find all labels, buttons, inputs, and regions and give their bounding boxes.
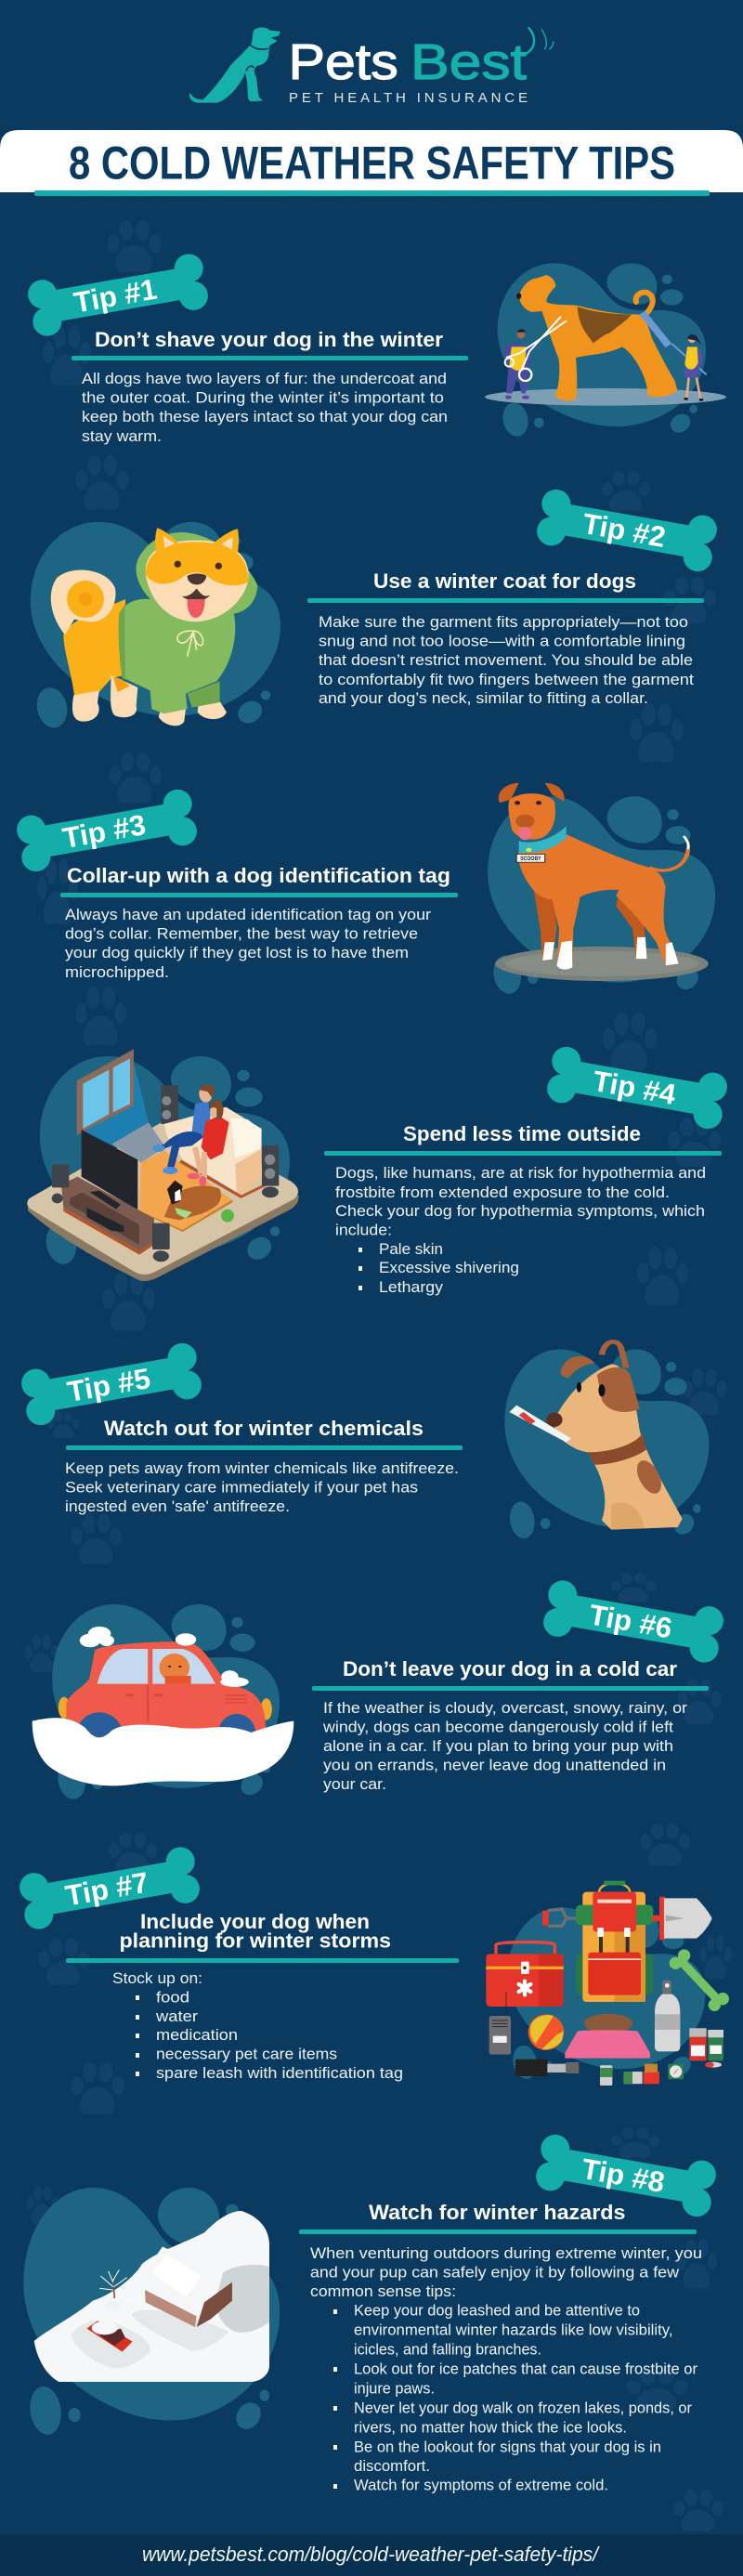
body text: the outer coat. During the winter it’s important to	[82, 388, 444, 407]
icon: sitting dog	[189, 27, 554, 103]
heading: Watch for winter hazards	[369, 2201, 626, 2224]
body text: you on errands, never leave dog unattended in	[323, 1757, 666, 1774]
panel: tip 6	[33, 1578, 725, 1802]
body text: ingested even 'safe' antifreeze.	[65, 1497, 290, 1515]
badge: tip 3 bone: Tip #3	[60, 808, 148, 855]
body text	[322, 1699, 687, 1793]
body text: Keep pets away from winter chemicals like antifreeze.	[65, 1459, 459, 1477]
heading: Collar-up with a dog identification tag	[67, 864, 450, 887]
illustration: car in snow with dog	[33, 1604, 293, 1802]
illustration: couple and dog watching TV	[27, 1049, 299, 1281]
body text	[65, 1459, 459, 1515]
illustration: dog with collar tag	[488, 783, 715, 997]
body text: microchipped.	[65, 963, 169, 981]
body text: injure paws.	[354, 2379, 435, 2397]
collar tag	[516, 855, 545, 862]
heading: planning for winter storms	[119, 1929, 391, 1953]
badge: tip 3 bone	[15, 787, 199, 874]
heading: Watch out for winter chemicals	[104, 1417, 424, 1440]
body text: alone in a car. If you plan to bring your pup with	[323, 1737, 673, 1755]
badge: tip 6 bone	[541, 1578, 725, 1665]
panel: tip 2	[31, 487, 719, 730]
heading	[119, 1910, 391, 1953]
illustration: sick dog with thermometer	[504, 1341, 709, 1541]
heading: Use a winter coat for dogs	[373, 569, 636, 593]
badge: tip 1 bone	[26, 252, 210, 338]
badge: tip 1 bone: Tip #1	[72, 272, 159, 320]
illustration: snowy house and car	[23, 2188, 280, 2438]
body text	[82, 370, 448, 445]
heading: Don’t leave your dog in a cold car	[343, 1657, 677, 1680]
panel: tip 1	[26, 252, 726, 445]
footer URL: www.petsbest.com/blog/cold-weather-pet-safety-tips/	[142, 2543, 600, 2566]
body text: All dogs have two layers of fur: the undercoat and	[82, 370, 447, 387]
body text: stay warm.	[82, 427, 162, 445]
body text: Dogs, like humans, are at risk for hypothermia and	[335, 1164, 706, 1182]
body text: snug and not too loose—with a comfortable lining	[319, 633, 685, 650]
badge: tip 2 bone: Tip #2	[580, 507, 668, 554]
logo word: Best: Best	[411, 34, 527, 90]
body text: necessary pet care items	[156, 2046, 337, 2063]
panel: tip 8	[23, 2132, 718, 2494]
body text: Pale skin	[379, 1240, 443, 1258]
body text: and your pup can safely enjoy it by following a few	[310, 2264, 680, 2282]
badge: tip 7 bone	[18, 1845, 202, 1931]
illustration: dog in green hoodie	[31, 522, 280, 730]
body text: Never let your dog walk on frozen lakes, ponds, or	[354, 2399, 692, 2416]
collar tag: SCOOBY	[520, 855, 541, 862]
badge: tip 5 bone	[20, 1340, 203, 1428]
body text: include:	[335, 1221, 392, 1239]
body text: Keep your dog leashed and be attentive to	[354, 2302, 640, 2320]
heading: Spend less time outside	[403, 1122, 641, 1145]
body text: Always have an updated identification tag on your	[65, 906, 431, 923]
title banner	[0, 130, 743, 196]
logo word: Pets: Pets	[289, 34, 398, 90]
body text: that doesn’t restrict movement. You should be able	[319, 651, 693, 669]
body text	[335, 1164, 706, 1296]
body text: environmental winter hazards like low visibility,	[354, 2321, 672, 2338]
badge: tip 6 bone: Tip #6	[587, 1598, 674, 1645]
body text: common sense tips:	[310, 2282, 456, 2300]
panel: tip 4	[27, 1044, 729, 1296]
badge: tip 2 bone	[535, 487, 719, 574]
body text: Lethargy	[379, 1278, 444, 1296]
badge: tip 8 bone: Tip #8	[580, 2152, 667, 2199]
heading: Include your dog when	[140, 1910, 370, 1933]
badge: tip 4 bone: Tip #4	[591, 1065, 679, 1111]
body text: and your dog’s neck, similar to fitting a collar.	[319, 689, 648, 707]
body text: Seek veterinary care immediately if your pet has	[65, 1479, 418, 1497]
body text: your car.	[323, 1775, 386, 1793]
body text: rivers, no matter how thick the ice looks.	[354, 2418, 627, 2436]
body text: Be on the lookout for signs that your dog is in	[354, 2438, 661, 2455]
body text: Watch for symptoms of extreme cold.	[354, 2477, 608, 2494]
body text: keep both these layers intact so that your dog can	[82, 408, 448, 425]
badge: tip 4 bone	[545, 1044, 729, 1131]
heading: Don’t shave your dog in the winter	[95, 328, 443, 351]
body text: your dog quickly if they get lost is to have them	[65, 944, 409, 961]
body text: Make sure the garment fits appropriately—not too	[319, 613, 688, 631]
body text	[319, 613, 694, 707]
body text: icicles, and falling branches.	[354, 2340, 541, 2358]
body text: If the weather is cloudy, overcast, snowy, rainy, or	[323, 1699, 687, 1717]
badge: tip 7 bone: Tip #7	[63, 1865, 150, 1913]
body text	[310, 2244, 702, 2494]
body text: Excessive shivering	[379, 1259, 519, 1276]
body text: dog’s collar. Remember, the best way to retrieve	[65, 925, 418, 943]
body text: medication	[156, 2026, 238, 2044]
logo tagline: PET HEALTH INSURANCE	[289, 90, 528, 106]
badge: tip 5 bone: Tip #5	[65, 1362, 152, 1408]
body text: spare leash with identification tag	[156, 2064, 403, 2082]
body text: Look out for ice patches that can cause frostbite or	[354, 2360, 697, 2377]
body text	[65, 906, 431, 981]
logo: Pets Best	[189, 27, 554, 106]
panel: tip 5	[20, 1340, 709, 1541]
body text	[112, 1969, 403, 2082]
body text: food	[156, 1988, 189, 2006]
body text: water	[155, 2007, 198, 2025]
panel: tip 7	[18, 1845, 729, 2086]
illustration: groomers and dog	[485, 263, 726, 438]
badge: tip 8 bone	[534, 2132, 718, 2219]
panel: tip 3	[15, 783, 715, 997]
footer band	[0, 2534, 743, 2576]
body text: discomfort.	[354, 2457, 430, 2475]
body text: Stock up on:	[112, 1969, 202, 1987]
body text: frostbite from extended exposure to the cold.	[335, 1183, 670, 1201]
body text: windy, dogs can become dangerously cold if left	[322, 1718, 673, 1735]
body text: When venturing outdoors during extreme winter, you	[310, 2244, 702, 2262]
body text: to comfortably fit two fingers between the garment	[319, 671, 694, 688]
illustration: emergency supplies	[486, 1881, 729, 2086]
body text: Check your dog for hypothermia symptoms, which	[335, 1202, 705, 1220]
